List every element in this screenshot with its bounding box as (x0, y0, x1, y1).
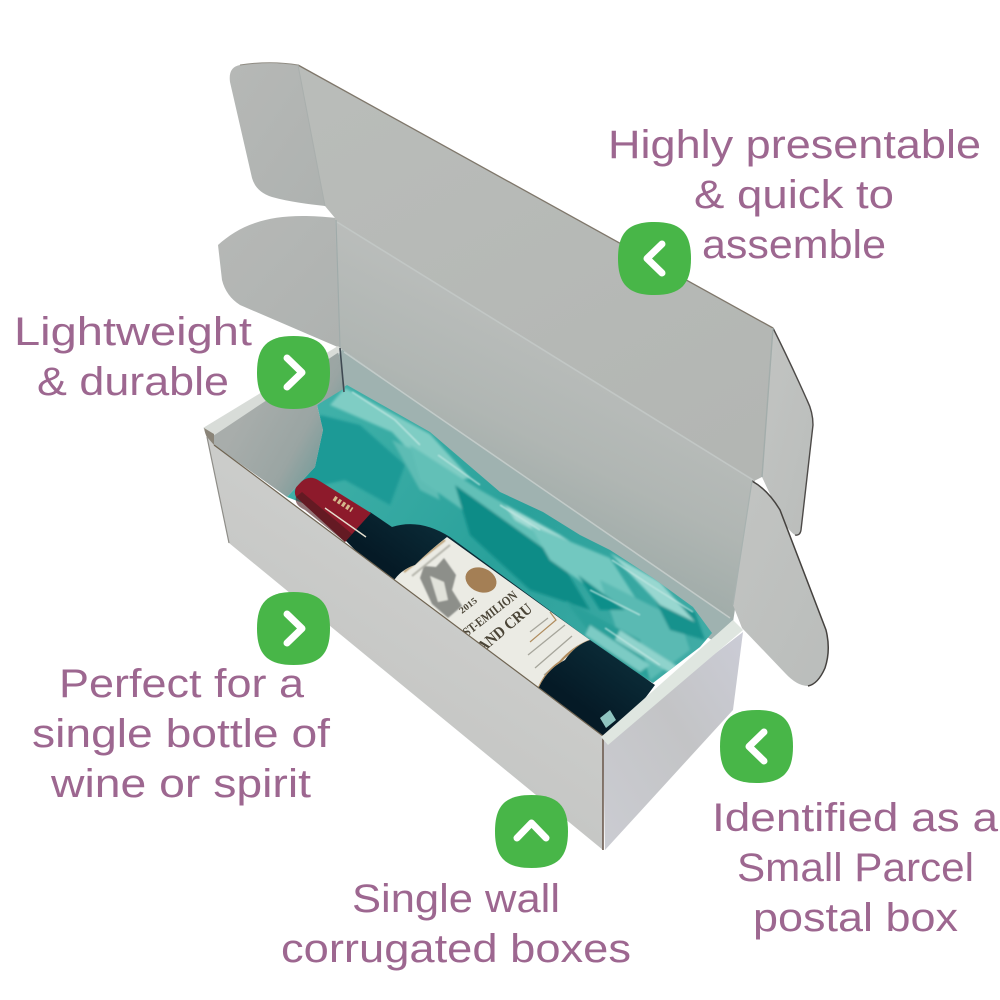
text: highly presentable: Highly presentable (608, 123, 981, 167)
box front wall (207, 437, 603, 850)
bottle label (394, 537, 590, 688)
text: single wall corrugated boxes: Single wall (352, 877, 560, 921)
icon: badge lightweight (257, 336, 330, 409)
box interior rear wall (330, 348, 733, 640)
text: single wall corrugated boxes (281, 877, 631, 971)
label small print (528, 618, 578, 675)
label engraving (404, 540, 462, 630)
box interior left wall (208, 350, 345, 497)
label year: 2015 (457, 595, 479, 616)
text: perfect for a single bottle: single bottle of (32, 712, 331, 756)
wine bottle (295, 478, 655, 745)
bottle glass (345, 512, 655, 745)
text: identified as small parcel postal box (712, 796, 999, 940)
label medal (466, 567, 496, 593)
text: perfect for a single bottle (32, 662, 331, 806)
lid top panel (298, 65, 773, 482)
text: highly presentable (608, 123, 981, 267)
text: single wall corrugated boxes: corrugated boxes (281, 927, 631, 971)
flap: lid upper right (762, 328, 813, 535)
text: identified as small parcel postal box: Identified as a (712, 796, 999, 840)
flap: lid lower right (733, 481, 828, 686)
bottle foil marks (600, 710, 616, 728)
box end wall (603, 632, 743, 850)
teal tissue paper (280, 380, 720, 690)
text: perfect for a single bottle: Perfect for a (59, 662, 305, 706)
label name line 2: GRAND CRU (458, 600, 536, 670)
text: identified as small parcel postal box: Small Parcel (737, 846, 974, 890)
icon: badge identified as small parcel (720, 710, 793, 783)
end wall rim (601, 620, 743, 745)
text: lightweight and durable: & durable (37, 360, 229, 404)
flap: rear lid lower left (218, 216, 340, 348)
text: highly presentable: assemble (702, 223, 886, 267)
text: lightweight and durable: Lightweight (14, 310, 252, 354)
text: lightweight and durable (14, 310, 252, 404)
icon: badge single wall (495, 795, 568, 868)
icon: badge perfect for a single bottle (257, 592, 330, 665)
text: perfect for a single bottle: wine or spirit (50, 762, 311, 806)
lid lower panel (335, 220, 755, 622)
flap: rear lid upper left (230, 63, 325, 206)
left wall rim (203, 346, 344, 446)
text: highly presentable: & quick to (694, 173, 894, 217)
text: identified as small parcel postal box: postal box (753, 896, 958, 940)
bottle red capsule (295, 478, 371, 542)
label name line 1: ST-EMILION (460, 587, 520, 639)
icon: badge highly presentable (618, 222, 691, 295)
